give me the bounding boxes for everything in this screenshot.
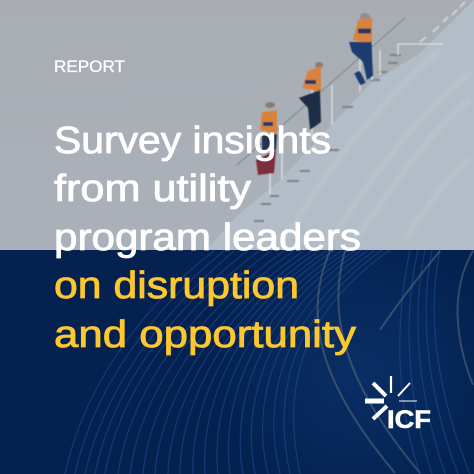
worker: bottom — [256, 102, 277, 175]
headline: from utility — [54, 168, 251, 210]
headline: Survey insights — [54, 120, 331, 162]
navy band — [0, 250, 474, 474]
headline: and opportunity — [54, 314, 356, 356]
photo: tank surface — [205, 0, 474, 251]
headline — [54, 120, 361, 356]
logo rays — [365, 376, 417, 419]
worker: top — [349, 13, 373, 84]
headline: program leaders — [54, 217, 361, 259]
ICF logo — [365, 376, 431, 434]
headline: on disruption — [54, 265, 299, 307]
photo: staircase — [237, 2, 465, 221]
worker: middle — [299, 62, 323, 130]
report label: REPORT — [54, 58, 125, 76]
flowing light lines — [65, 250, 470, 474]
photo: wall background — [0, 0, 474, 251]
logo wordmark: ICF — [387, 406, 431, 434]
grey arcs — [318, 251, 473, 473]
